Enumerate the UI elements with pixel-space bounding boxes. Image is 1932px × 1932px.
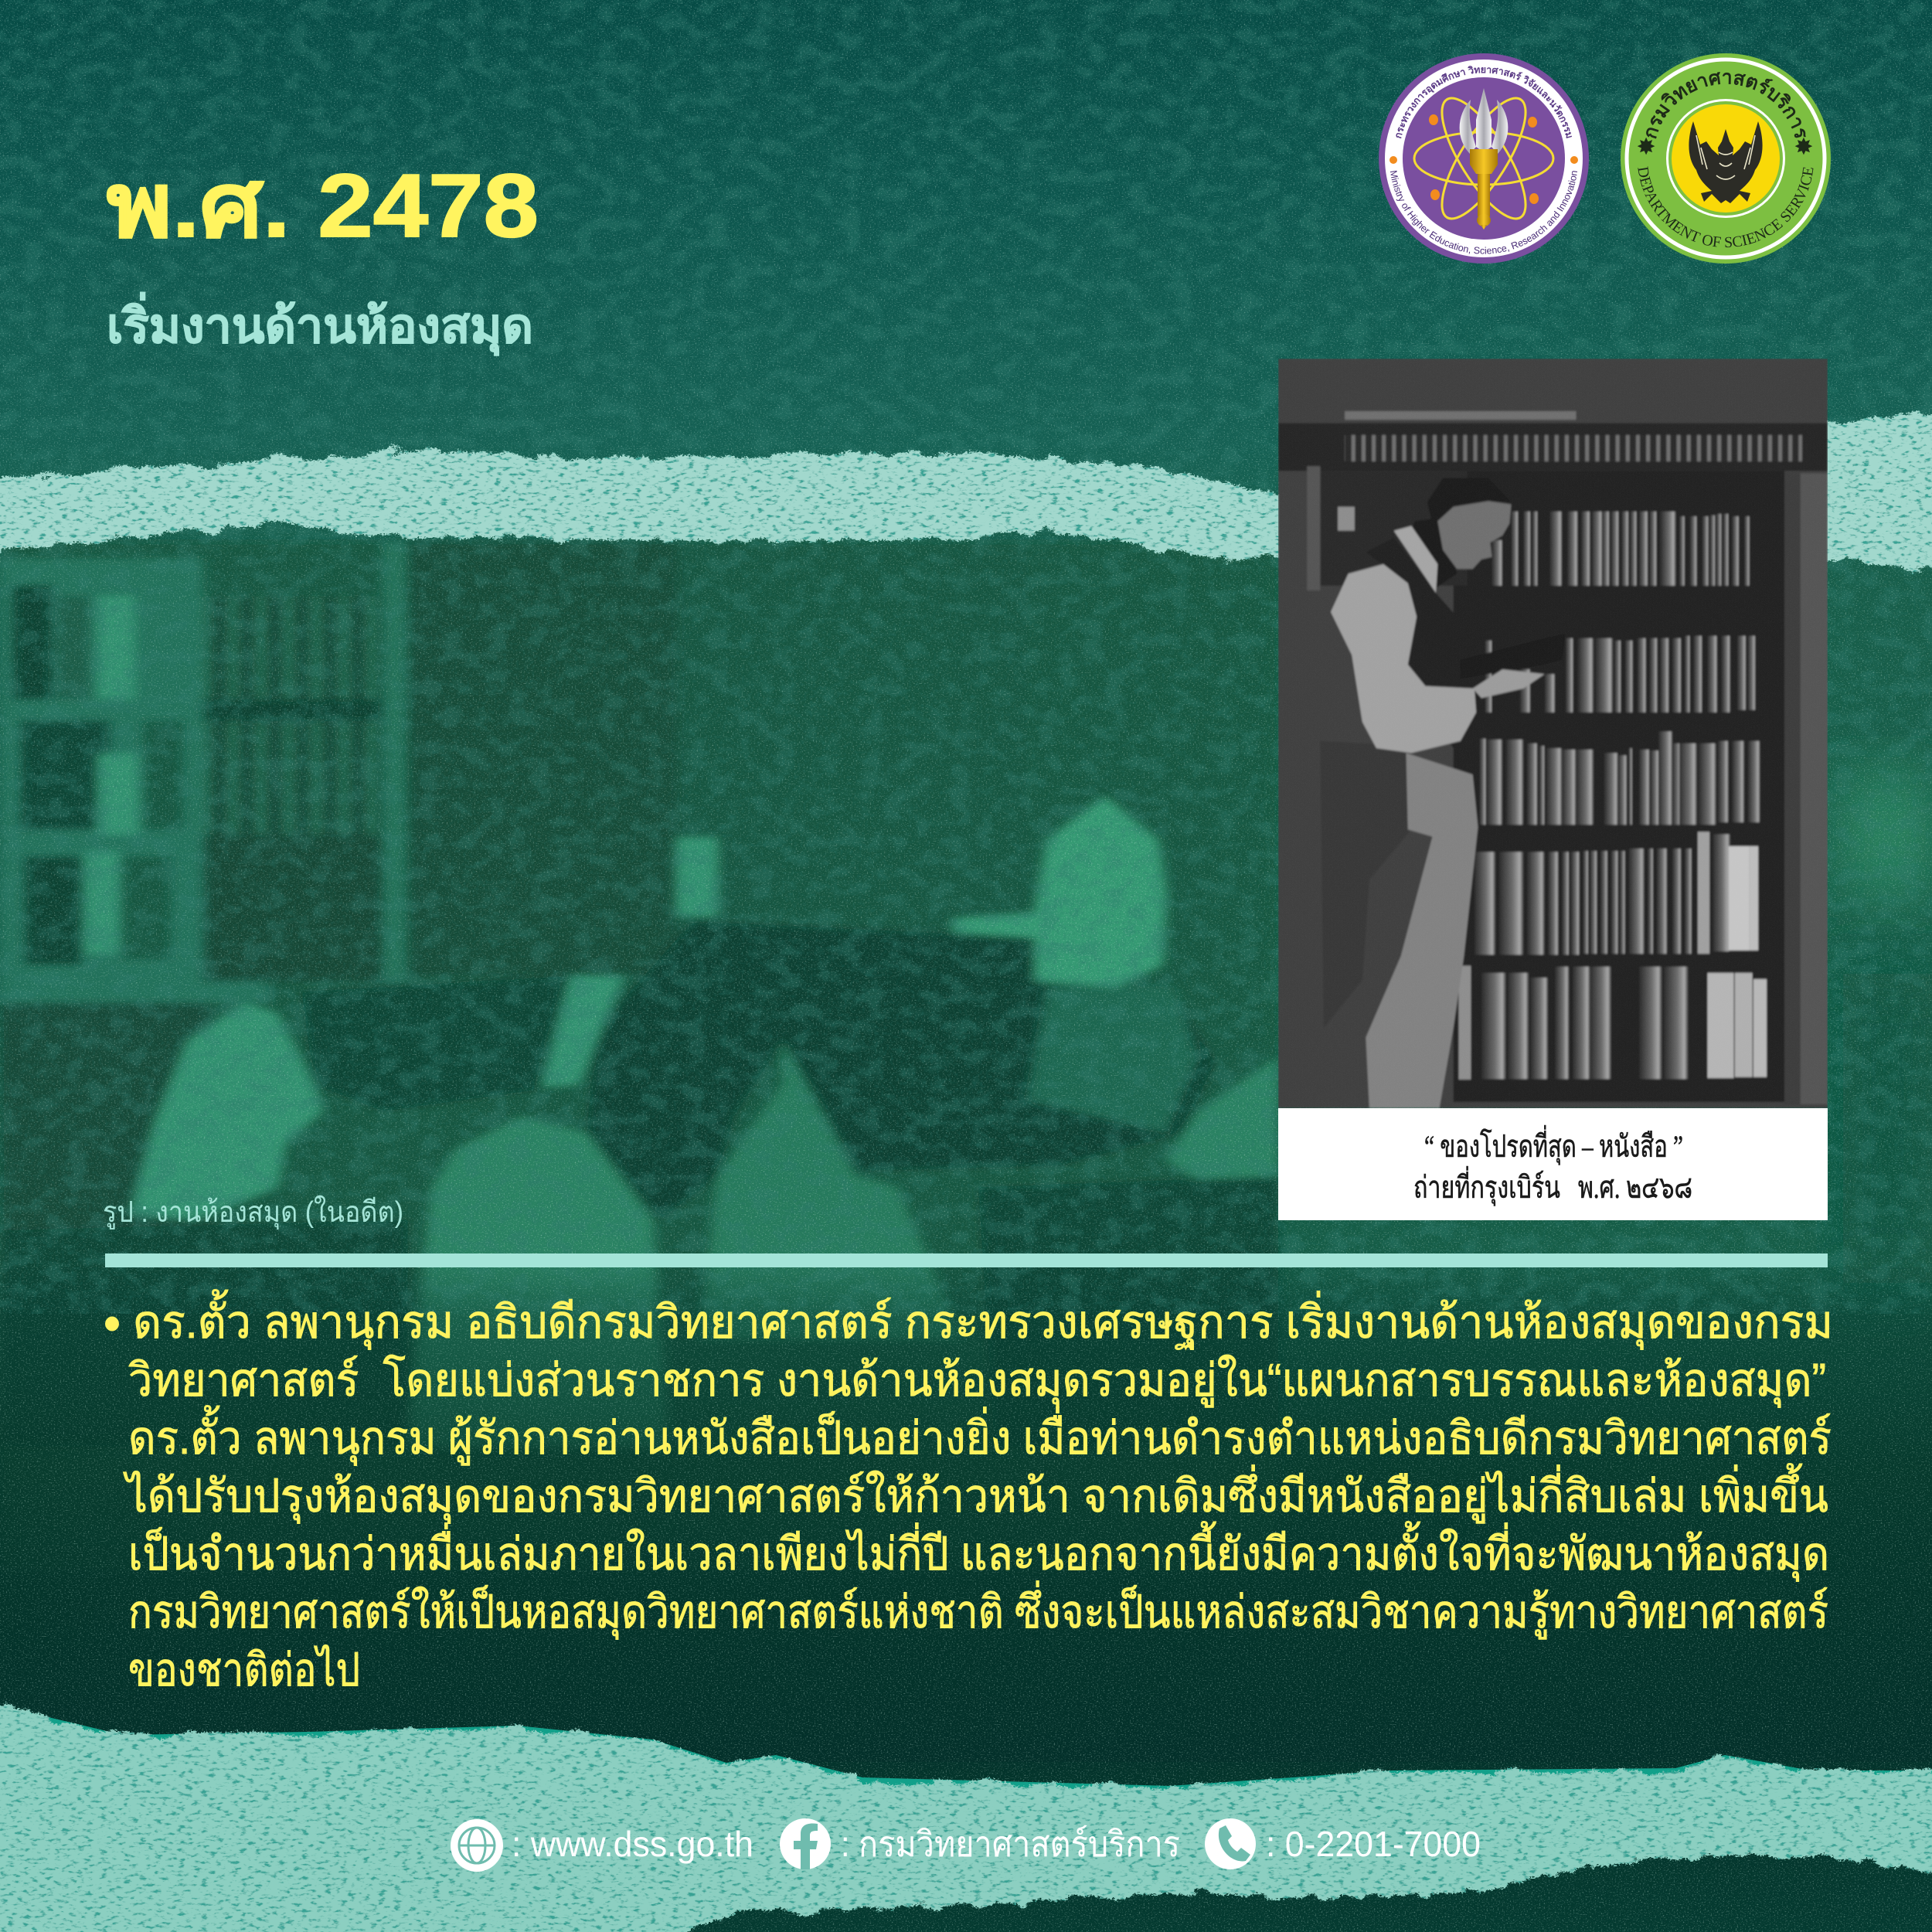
shelf 5 books: [1481, 967, 1689, 1079]
stars: ✸: [1636, 134, 1656, 160]
shelf 2 books: [1485, 636, 1756, 713]
subtitle: เริ่มงานด้านห้องสมุด: [107, 292, 533, 355]
line 4: ได้ปรับปรุงห้องสมุดของกรมวิทยาศาสตร์ให้ก้าวหน้า จากเดิมซึ่งมีหนังสืออยู่ไม่กี่สิบเล่ม เพิ่มขึ้น: [123, 1463, 1828, 1524]
background photo: old library reading room in green tone: [0, 541, 1281, 1447]
vajra gold handle: [1470, 149, 1498, 230]
man: neck shade: [1411, 516, 1457, 588]
top row of books: [1345, 435, 1802, 461]
shelf 1 books: [1492, 512, 1750, 586]
background photo credit: รูป : งานห้องสมุด (ในอดีต): [103, 1196, 403, 1230]
line 7: ของชาติต่อไป: [128, 1644, 360, 1696]
logo: Department of Science Service: [1621, 53, 1831, 264]
website: : www.dss.go.th: [512, 1824, 753, 1864]
body text: [105, 1289, 1833, 1696]
line 3: ดร.ตั้ว ลพานุกรม ผู้รักการอ่านหนังสือเป็นอย่างยิ่ง เมื่อท่านดำรงตำแหน่งอธิบดีกรมวิทยาศาสตร์: [128, 1405, 1832, 1466]
cornice: [1345, 411, 1576, 420]
caption line 1: “ ของโปรดที่สุด – หนังสือ ”: [1424, 1125, 1683, 1165]
vajra blades: [1460, 88, 1508, 154]
line 5: เป็นจำนวนกว่าหมื่นเล่มภายในเวลาเพียงไม่กี่ปี และนอกจากนี้ยังมีความตั้งใจที่จะพัฒนาห้องสมุด: [128, 1521, 1829, 1582]
atom nuclei: [1429, 114, 1539, 204]
man: vest: [1366, 538, 1475, 774]
right side green glow: [1843, 773, 1932, 896]
stars: [1636, 134, 1814, 160]
caption line 2: ถ่ายที่กรุงเบิร์น พ.ศ. ๒๔๖๘: [1413, 1166, 1692, 1206]
line 2: วิทยาศาสตร์ โดยแบ่งส่วนราชการ งานด้านห้องสมุดรวมอยู่ใน“แผนกสารบรรณและห้องสมุด”: [128, 1354, 1826, 1408]
department name, Thai: กรมวิทยาศาสตร์บริการ: [1646, 72, 1806, 139]
torn paper strip: top: [0, 410, 1932, 570]
footer contacts: [451, 1818, 1481, 1872]
shelf 4 books: [1475, 835, 1730, 954]
man: trousers: [1366, 753, 1478, 1108]
garuda emblem: [1689, 121, 1763, 203]
title: พ.ศ. 2478: [107, 155, 539, 256]
man: collar: [1394, 526, 1437, 593]
icon: phone: [1205, 1818, 1256, 1869]
ministry name, English: Ministry of Higher Education, Science, Research and Innovation: [1389, 170, 1577, 254]
garuda light details: [1696, 135, 1755, 179]
phone number: : 0-2201-7000: [1266, 1824, 1481, 1864]
torn paper strip: bottom, teal edge: [0, 1706, 1932, 1808]
orange dots: [1389, 156, 1578, 164]
man: dark coat tails: [1320, 741, 1411, 1028]
right side lower shade: [1843, 974, 1932, 1283]
atom orbits: [1414, 87, 1553, 230]
icon: globe: [451, 1819, 503, 1872]
man: shirt sleeve: [1331, 564, 1476, 753]
door frame: [1801, 473, 1828, 1104]
bullet: [105, 1317, 119, 1331]
line 1: ดร.ตั้ว ลพานุกรม อธิบดีกรมวิทยาศาสตร์ กระทรวงเศรษฐการ เริ่มงานด้านห้องสมุดของกรม: [133, 1289, 1833, 1350]
large mottled shade: [0, 0, 1932, 1314]
man: hair: [1427, 478, 1512, 523]
hand: [1473, 669, 1545, 698]
divider bar: [105, 1253, 1828, 1267]
lower dark gradient overlay: [0, 1267, 1932, 1762]
photo grain: [1278, 359, 1828, 1108]
man: face: [1437, 501, 1512, 569]
photo caption panel: [1278, 1108, 1828, 1220]
department name, English: DEPARTMENT OF SCIENCE SERVICE: [1638, 166, 1813, 247]
logo: Ministry of Higher Education, Science, Research and Innovation: [1379, 53, 1589, 264]
stars: ✸: [1794, 134, 1814, 160]
icon: facebook: [780, 1818, 831, 1869]
shelf 3 books: [1480, 732, 1760, 825]
open book: [1461, 634, 1566, 679]
bookcase interior: [1454, 471, 1784, 1102]
historic photo: man reading at bookcase: [1278, 359, 1828, 1108]
facebook page name: : กรมวิทยาศาสตร์บริการ: [841, 1824, 1180, 1864]
ministry name, Thai: กระทรวงการอุดมศึกษา วิทยาศาสตร์ วิจัยและนวัตกรรม: [1396, 66, 1572, 139]
texture dark flecks: [0, 0, 1932, 1314]
torn paper strip: bottom: [0, 1703, 1932, 1932]
